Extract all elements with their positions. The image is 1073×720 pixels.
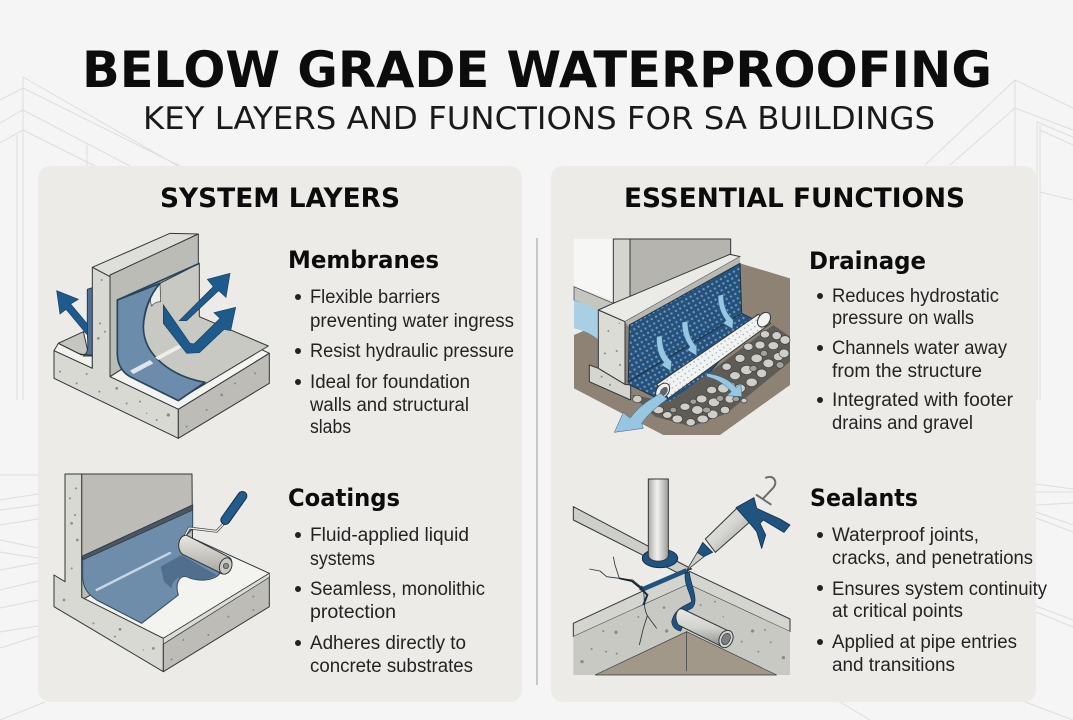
bullet list: drainage: pressure on walls (832, 308, 974, 329)
centre divider (536, 238, 538, 685)
bullet list: membranes: Flexible barriers (310, 287, 440, 308)
heading: system layers: SYSTEM LAYERS (160, 183, 400, 214)
bullet list: sealants: and transitions (832, 655, 955, 676)
bullet list: membranes: Resist hydraulic pressure (310, 341, 514, 362)
heading: essential functions: ESSENTIAL FUNCTIONS (624, 183, 965, 214)
title: BELOW GRADE WATERPROOFING (82, 41, 992, 99)
bullet list: sealants: Applied at pipe entries (832, 632, 1017, 653)
bullet list: sealants: at critical points (832, 601, 963, 622)
bullet list: sealants (817, 525, 1047, 676)
illustration: coating applied with roller (54, 474, 269, 672)
bullet list: membranes: slabs (310, 417, 351, 438)
illustration: drainage mat and perforated pipe (574, 239, 790, 435)
subheading: sealants: Sealants (810, 484, 918, 512)
bullet list: coatings: systems (310, 549, 375, 570)
text block: sealants (810, 484, 1047, 676)
subheading: coatings: Coatings (288, 484, 400, 512)
bullet list: membranes: Ideal for foundation (310, 372, 470, 393)
bullet list: coatings: protection (310, 602, 396, 623)
bullet list: drainage: Channels water away (832, 338, 1007, 359)
panel: system layers (38, 166, 522, 702)
bullet list: drainage: Reduces hydrostatic (832, 286, 999, 307)
illustration: membrane on foundation wall (54, 233, 269, 438)
subheading: membranes: Membranes (288, 246, 439, 274)
subtitle: KEY LAYERS AND FUNCTIONS FOR SA BUILDINGS (143, 101, 935, 137)
bullet list: drainage: from the structure (832, 361, 982, 382)
text block: coatings (288, 484, 485, 677)
panel: essential functions (551, 166, 1047, 702)
bullet list: coatings: concrete substrates (310, 656, 473, 677)
bullet list: coatings (295, 525, 485, 677)
bullet list: membranes: walls and structural (309, 395, 469, 416)
bullet list: membranes: preventing water ingress (310, 311, 514, 332)
bullet list: sealants: cracks, and penetrations (832, 548, 1033, 569)
text block: membranes (288, 246, 514, 438)
text block: drainage (809, 247, 1014, 434)
subheading: drainage: Drainage (809, 247, 926, 275)
bullet list: drainage (817, 286, 1014, 434)
bullet list: membranes (295, 287, 514, 438)
bullet list: drainage: Integrated with footer (832, 390, 1014, 411)
bullet list: coatings: Fluid-applied liquid (310, 525, 469, 546)
bullet list: sealants: Ensures system continuity (832, 579, 1047, 600)
bullet list: coatings: Adheres directly to (310, 633, 466, 654)
bullet list: sealants: Waterproof joints, (832, 525, 979, 546)
bullet list: drainage: drains and gravel (832, 413, 973, 434)
bullet list: coatings: Seamless, monolithic (310, 579, 485, 600)
illustration: sealant gun at pipe penetration (573, 477, 790, 675)
